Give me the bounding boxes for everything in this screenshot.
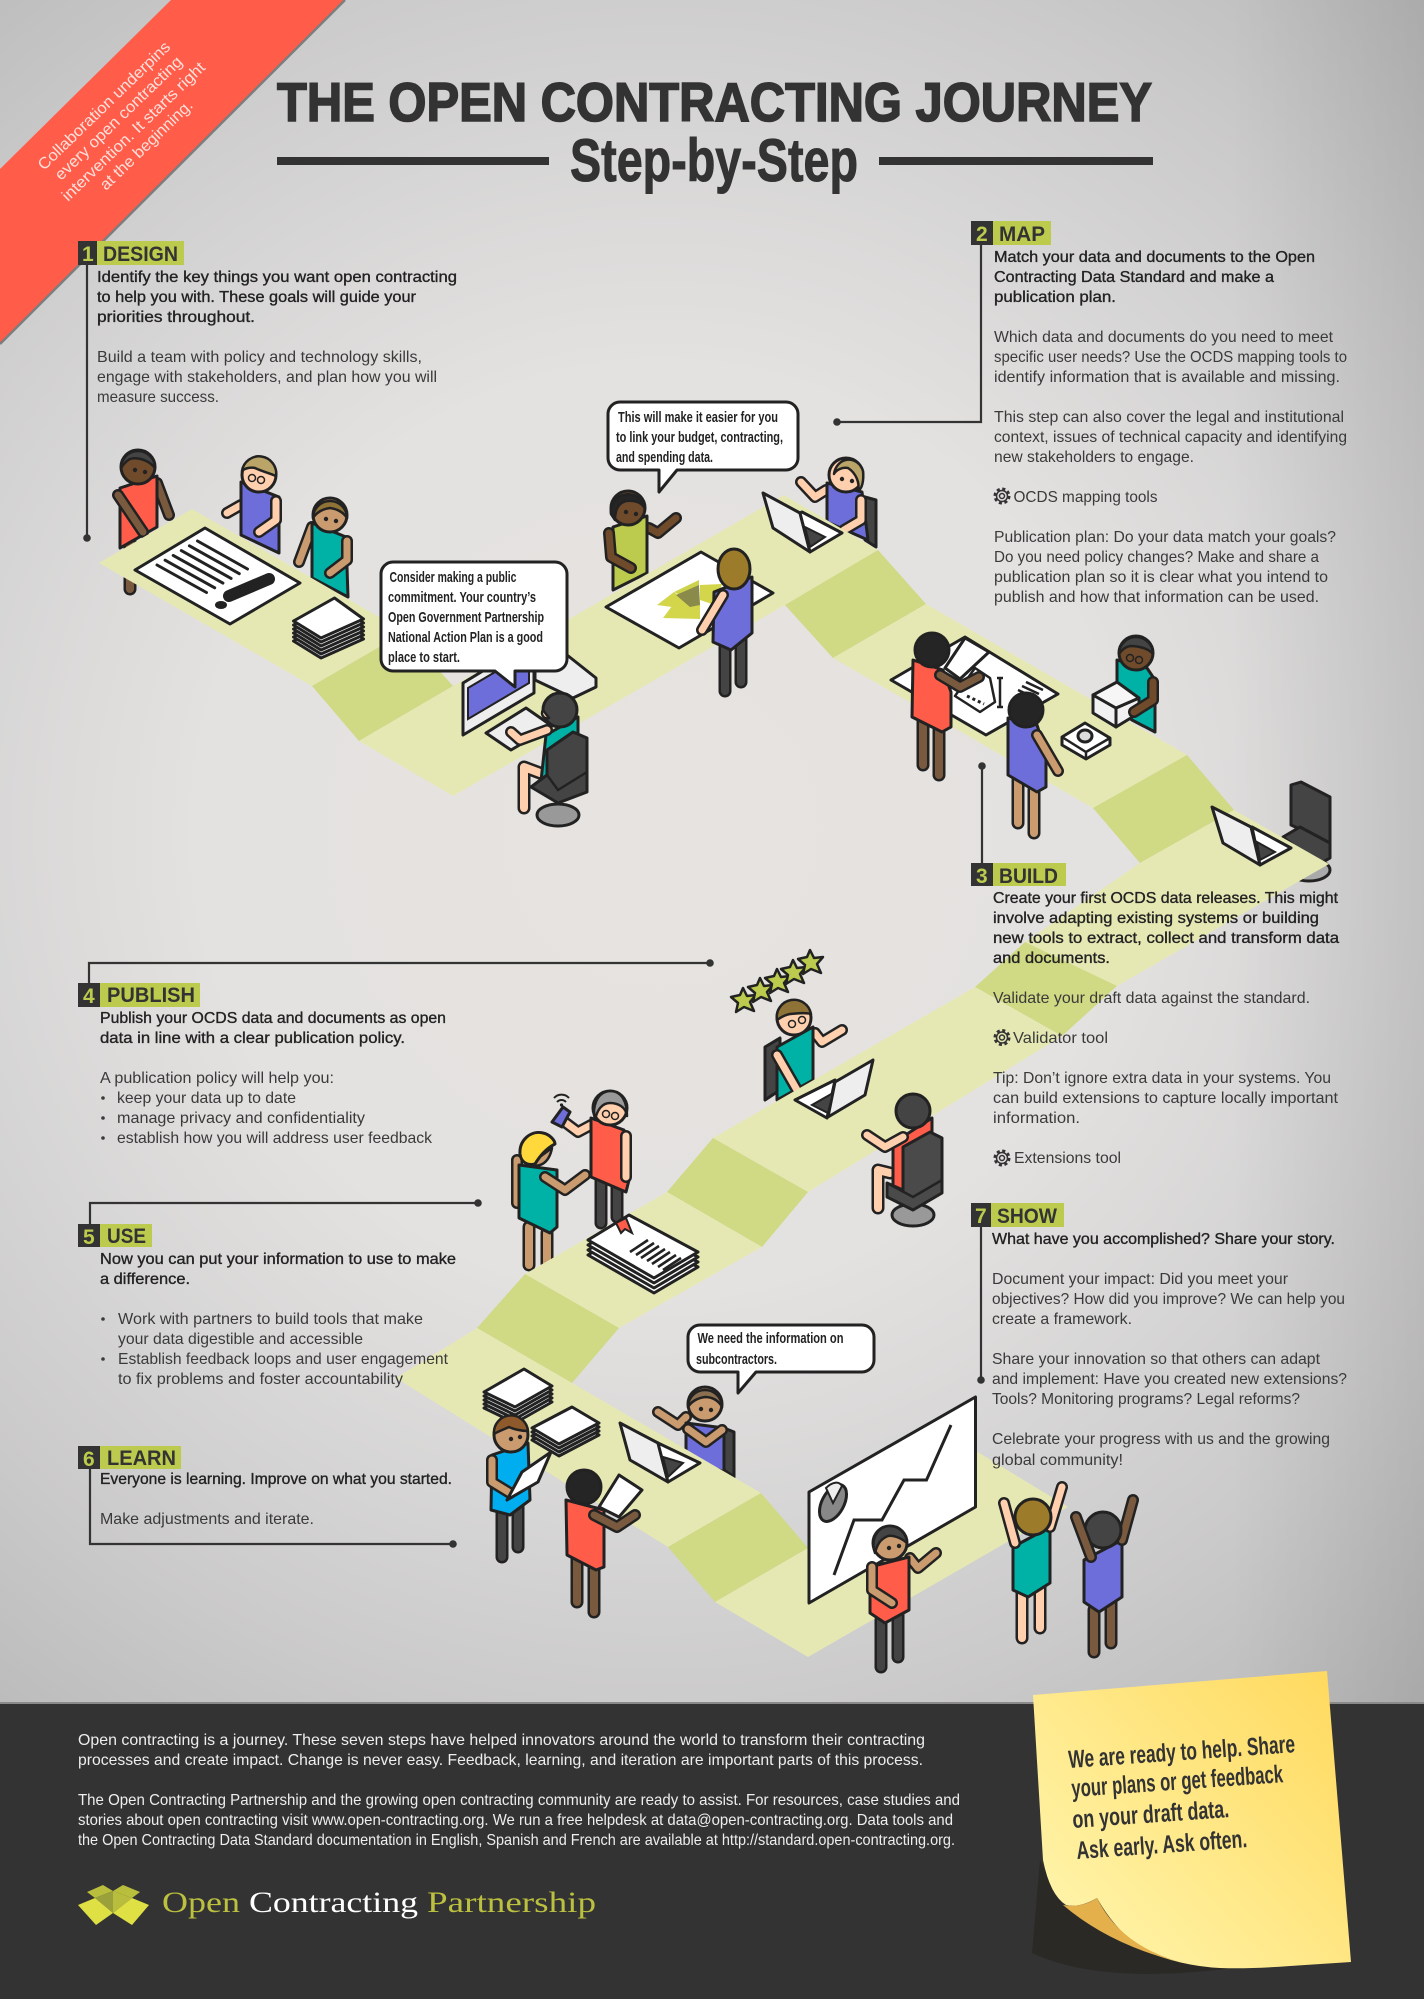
- paper stack, tall: [484, 1369, 552, 1423]
- red corner banner: every open contracting: [52, 54, 186, 184]
- step 7: show: SHOW: [997, 1205, 1057, 1228]
- connector line: [837, 245, 981, 422]
- step 3: build: Tip: Don’t ignore extra data in your systems. You: [993, 1070, 1331, 1087]
- step 7: show: objectives? How did you improve? We can help you: [992, 1291, 1345, 1308]
- step 3: build: Create your first OCDS data releases. This might: [993, 890, 1339, 907]
- whiteboard with line chart: [809, 1397, 976, 1603]
- stars rating: [731, 950, 823, 1012]
- step 7: show: global community!: [992, 1452, 1123, 1469]
- laptop, learn step: [620, 1423, 700, 1482]
- step 2: map: identify information that is available and missing.: [994, 369, 1340, 386]
- step 3: build: BUILD: [999, 865, 1058, 888]
- step 4: publish: PUBLISH: [107, 984, 195, 1007]
- footer text: Open contracting is a journey. These seven steps have helped innovators around the world to transform their contracting: [78, 1732, 925, 1749]
- step 5: use: USE: [107, 1225, 146, 1248]
- step 6: learn: LEARN: [107, 1447, 176, 1470]
- step 4: publish: establish how you will address user feedback: [117, 1130, 433, 1147]
- step 2: map: This step can also cover the legal and institutional: [994, 409, 1344, 426]
- step 5: use: your data digestible and accessible: [118, 1331, 363, 1348]
- laptop, publish step: [795, 1060, 873, 1118]
- title: [277, 72, 1153, 194]
- step 2: map: Contracting Data Standard and make a: [994, 269, 1274, 286]
- sticky note: Ask early. Ask often.: [1075, 1825, 1248, 1865]
- step 7: show: Tools? Monitoring programs? Legal reforms?: [992, 1391, 1300, 1408]
- person: blue dress, glasses: [227, 456, 279, 553]
- step 3: build: 3: [976, 865, 988, 888]
- person: teal dress, arms raised: [1004, 1487, 1062, 1638]
- connector line: [89, 963, 710, 983]
- journey path: [99, 495, 1329, 1657]
- speech bubble: link budget: This will make it easier for you: [618, 409, 778, 426]
- step 1: design: engage with stakeholders, and plan how you will: [97, 369, 437, 386]
- step 2: map: Do you need policy changes? Make and share a: [994, 549, 1319, 566]
- table with open contracting logo sheet: [606, 552, 773, 648]
- step 3: build: Validator tool: [1013, 1030, 1108, 1047]
- step 4: publish: A publication policy will help you:: [100, 1070, 334, 1087]
- step 1: design: DESIGN: [103, 243, 178, 266]
- title: Step-by-Step: [570, 127, 858, 194]
- step 2: map: Publication plan: Do your data match your goals?: [994, 529, 1336, 546]
- step 2: map: OCDS mapping tools: [1014, 489, 1158, 506]
- office chair, end of map path: [1283, 782, 1330, 881]
- connector line: [90, 1469, 453, 1544]
- step 5: use: Work with partners to build tools that make: [118, 1311, 423, 1328]
- paper stack: [294, 598, 364, 658]
- step 2: map: publication plan so it is clear what you intend to: [994, 569, 1328, 586]
- footer text: The Open Contracting Partnership and the growing open contracting community are ready to assist. For resources, case studies and: [78, 1792, 960, 1809]
- step 1: design: to help you with. These goals will guide your: [97, 289, 417, 306]
- person: red dress with phone: [552, 1091, 629, 1223]
- logo: open contracting partnership: [78, 1885, 596, 1925]
- small box with disc: [1062, 723, 1110, 759]
- speech bubble: public commitment: Open Government Partnership: [388, 609, 544, 626]
- laptop, map step: [763, 493, 842, 552]
- person: teal dress, chair, publish step: [765, 1000, 842, 1100]
- step 4: publish: Publish your OCDS data and documents as open: [100, 1010, 446, 1027]
- step 3: build: [971, 762, 1339, 1167]
- step 6: learn: [78, 1446, 457, 1548]
- footer text: processes and create impact. Change is never easy. Feedback, learning, and iteration are important parts of this process.: [78, 1752, 923, 1769]
- step 1: design: measure success.: [97, 389, 219, 406]
- speech bubble: link budget: [608, 402, 798, 492]
- step 7: show: What have you accomplished? Share your story.: [992, 1231, 1335, 1248]
- icon: gear: [995, 1151, 1009, 1165]
- speech bubble: public commitment: Consider making a public: [390, 569, 516, 586]
- step 3: build: involve adapting existing systems or building: [993, 910, 1319, 927]
- step 7: show: Celebrate your progress with us and the growing: [992, 1431, 1330, 1448]
- connector line: [981, 766, 983, 863]
- step 5: use: 5: [83, 1226, 95, 1249]
- red corner banner: at the beginning.: [97, 97, 197, 194]
- step 7: show: Share your innovation so that others can adapt: [992, 1351, 1321, 1368]
- sticky note: your plans or get feedback: [1070, 1760, 1284, 1803]
- speech bubble: public commitment: place to start.: [388, 649, 460, 666]
- speech bubble: subcontractors: We need the information on: [698, 1330, 844, 1347]
- person: blue dress at map table: [702, 549, 752, 691]
- speech bubble: link budget: and spending data.: [616, 449, 713, 466]
- person: red dress, seated in chair: [867, 1094, 942, 1226]
- step 2: map: Which data and documents do you need to meet: [994, 329, 1334, 346]
- step 7: show: and implement: Have you created new extensions?: [992, 1371, 1347, 1388]
- red corner banner: Collaboration underpins: [35, 39, 174, 174]
- step 2: map: specific user needs? Use the OCDS mapping tools to: [994, 349, 1347, 366]
- logo: open contracting partnership: Partnership: [427, 1886, 596, 1919]
- step 3: build: Validate your draft data against the standard.: [993, 990, 1310, 1007]
- person: teal dress, yellow hair: [517, 1132, 585, 1265]
- step 1: design: 1: [82, 243, 94, 266]
- speech bubble: link budget: to link your budget, contracting,: [616, 429, 783, 446]
- step 4: publish: [78, 959, 714, 1147]
- bound document stack: [588, 1215, 698, 1293]
- connector line: [980, 1227, 982, 1380]
- step 2: map: new stakeholders to engage.: [994, 449, 1194, 466]
- red corner banner: [0, 0, 345, 344]
- person: red dress with paper: [912, 633, 989, 775]
- person: blue dress, arms raised: [1076, 1500, 1133, 1652]
- step 2: map: 2: [976, 223, 988, 246]
- speech bubble: subcontractors: subcontractors.: [696, 1351, 777, 1368]
- document sheet with pen: [135, 528, 300, 624]
- speech bubble: subcontractors: [688, 1325, 874, 1393]
- step 7: show: 7: [975, 1205, 987, 1228]
- person: teal dress: [299, 498, 348, 597]
- speech bubble: public commitment: [381, 562, 567, 687]
- step 1: design: priorities throughout.: [97, 309, 255, 326]
- step 1: design: [78, 241, 457, 542]
- icon: phone: [552, 1107, 570, 1127]
- step 5: use: a difference.: [100, 1271, 190, 1288]
- step 2: map: publication plan.: [994, 289, 1116, 306]
- person: blue dress at laptop, map step: [801, 458, 876, 547]
- step 3: build: and documents.: [993, 950, 1110, 967]
- red corner banner: intervention. It starts right: [59, 59, 209, 205]
- person: teal dress holding box: [1117, 636, 1155, 732]
- step 4: publish: data in line with a clear publication policy.: [100, 1030, 405, 1047]
- sticky note: We are ready to help. Share: [1067, 1730, 1296, 1774]
- step 2: map: [833, 221, 1347, 606]
- title: THE OPEN CONTRACTING JOURNEY: [277, 72, 1152, 133]
- desktop computer: [463, 640, 596, 750]
- person: blue dress, seated, arms crossed: [658, 1387, 734, 1477]
- step 7: show: [971, 1203, 1347, 1469]
- step 7: show: create a framework.: [992, 1311, 1132, 1328]
- step 3: build: can build extensions to capture locally important: [993, 1090, 1339, 1107]
- step 7: show: Document your impact: Did you meet your: [992, 1271, 1289, 1288]
- step 2: map: context, issues of technical capacity and identifying: [994, 429, 1347, 446]
- person: teal, seated at computer: [511, 693, 587, 826]
- sticky note: on your draft data.: [1071, 1795, 1230, 1834]
- step 1: design: Build a team with policy and technology skills,: [97, 349, 422, 366]
- footer text: stories about open contracting visit www.open-contracting.org. We run a free helpdesk at data@open-contracting.org. Data tools and: [78, 1812, 953, 1829]
- step 5: use: Establish feedback loops and user engagement: [118, 1351, 449, 1368]
- icon: gear: [995, 1030, 1009, 1044]
- footer text: [78, 1732, 960, 1849]
- box held by person: [1093, 682, 1153, 727]
- step 3: build: information.: [993, 1110, 1080, 1127]
- step 6: learn: Everyone is learning. Improve on what you started.: [100, 1471, 452, 1488]
- step 6: learn: 6: [83, 1448, 95, 1471]
- step 5: use: Now you can put your information to use to make: [100, 1251, 456, 1268]
- step 2: map: MAP: [999, 223, 1045, 246]
- build table with plans: [891, 637, 1058, 735]
- step 2: map: publish and how that information can be used.: [994, 589, 1319, 606]
- speech bubble: public commitment: National Action Plan is a good: [388, 629, 543, 646]
- step 1: design: Identify the key things you want open contracting: [97, 269, 457, 286]
- step 3: build: new tools to extract, collect and transform data: [993, 930, 1339, 947]
- person: olive dress, speaking: [609, 491, 676, 590]
- laptop, build step: [1212, 807, 1291, 865]
- paper stack, short: [532, 1407, 599, 1456]
- person: blue dress, tan skin, build step: [1008, 693, 1058, 833]
- logo: open contracting partnership: Contracting: [249, 1886, 418, 1919]
- step 2: map: Match your data and documents to the Open: [994, 249, 1315, 266]
- person: red dress presenting: [870, 1526, 936, 1667]
- icon: wifi signal: [554, 1095, 569, 1107]
- step 6: learn: Make adjustments and iterate.: [100, 1511, 314, 1528]
- logo: open contracting partnership: Open: [162, 1886, 240, 1919]
- step 4: publish: manage privacy and confidentiality: [117, 1110, 365, 1127]
- person: sky blue dress with paper: [491, 1415, 551, 1557]
- step 4: publish: keep your data up to date: [117, 1090, 296, 1107]
- person: red dress, reading: [566, 1470, 642, 1612]
- step 5: use: [78, 1199, 482, 1388]
- footer panel: [0, 1702, 1424, 1999]
- connector line: [90, 1203, 478, 1224]
- step 4: publish: 4: [83, 985, 95, 1008]
- connector line: [86, 265, 88, 538]
- speech bubble: public commitment: commitment. Your country’s: [388, 589, 536, 606]
- step 3: build: Extensions tool: [1014, 1150, 1121, 1167]
- person: red dress, design step: [118, 450, 169, 589]
- footer text: the Open Contracting Data Standard documentation in English, Spanish and French are available at http://standard.open-contracting.org.: [78, 1832, 955, 1849]
- step 5: use: to fix problems and foster accountability: [118, 1371, 403, 1388]
- sticky note: [1032, 1671, 1351, 1974]
- icon: gear: [995, 489, 1009, 503]
